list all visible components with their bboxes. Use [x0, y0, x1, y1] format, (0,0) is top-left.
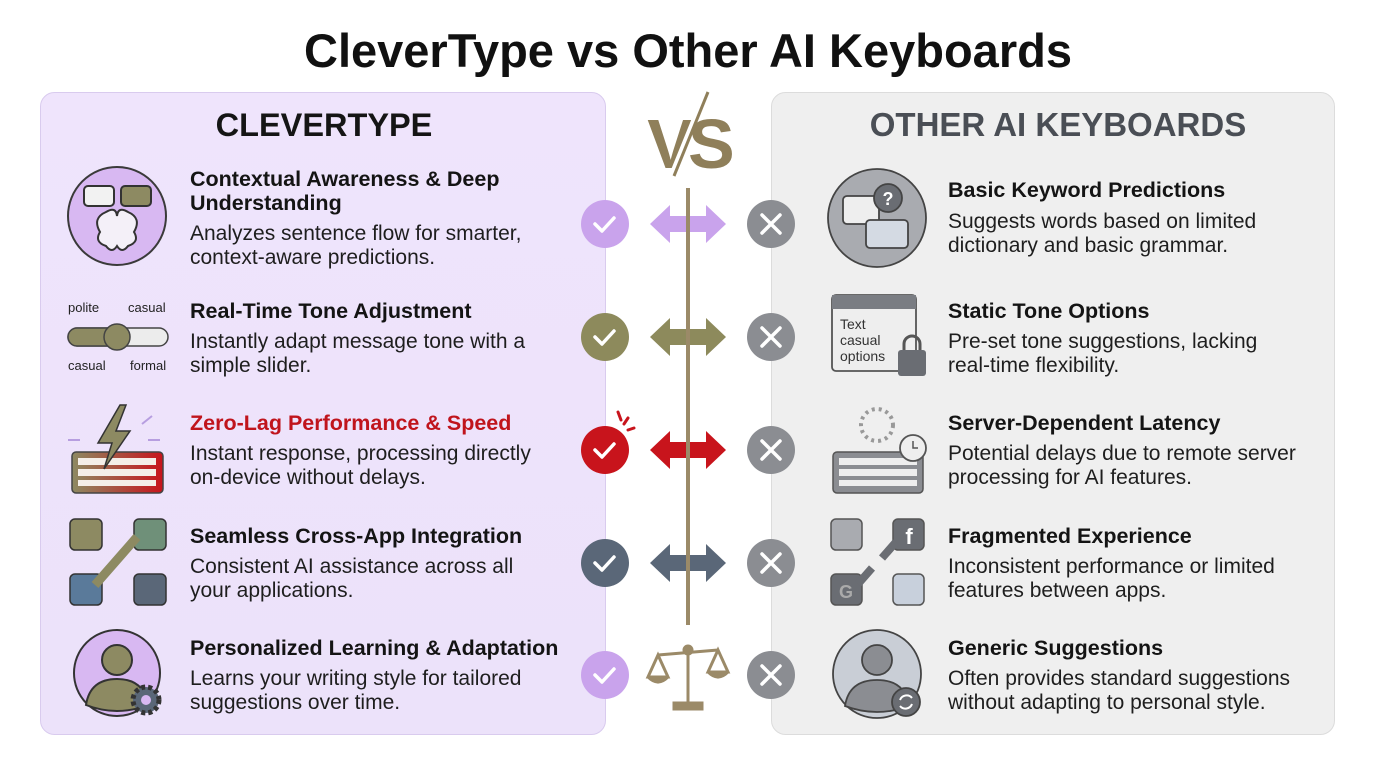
check marks — [581, 200, 634, 699]
arrows — [650, 200, 726, 585]
text: basic keyword: dictionary and basic grammar. — [948, 234, 1228, 257]
icon: vs: VS — [647, 105, 732, 183]
text: static tone: real-time flexibility. — [948, 354, 1119, 377]
text: fragmented: Inconsistent performance or limited — [948, 555, 1275, 578]
text: generic: Often provides standard suggestions — [948, 667, 1290, 690]
text: basic keyword — [948, 178, 1256, 257]
text: static tone — [948, 299, 1257, 377]
icon: tone slider: casual — [128, 300, 166, 315]
text: fragmented — [948, 524, 1275, 602]
title: CleverType vs Other AI Keyboards — [304, 24, 1072, 77]
text: fragmented: Fragmented Experience — [948, 524, 1192, 548]
row 2 left — [68, 299, 525, 377]
text: basic keyword: Suggests words based on limited — [948, 210, 1256, 233]
icon: static tone window: options — [840, 348, 885, 364]
row 3 left — [68, 405, 531, 493]
text: server latency: Server-Dependent Latency — [948, 411, 1220, 435]
icon: static tone window — [832, 295, 926, 376]
text: contextual awareness: Understanding — [190, 191, 342, 215]
icon: cross-app — [70, 519, 166, 605]
row 5 left — [74, 630, 558, 716]
text: tone — [190, 299, 525, 377]
icon: static tone window: Text — [840, 316, 866, 332]
row 2 right — [832, 295, 1257, 377]
row 4 left — [70, 519, 522, 605]
row 3 right — [833, 409, 1296, 493]
text: contextual awareness — [190, 167, 521, 269]
row 1 right — [828, 169, 1256, 267]
text: tone: Instantly adapt message tone with a — [190, 330, 525, 353]
text: zero-lag: on-device without delays. — [190, 466, 426, 489]
icon: keyboard lightning — [68, 405, 163, 493]
icon: fragmented apps — [831, 519, 924, 605]
icon: tone slider: polite — [68, 300, 99, 315]
text: cross-app: Consistent AI assistance across all — [190, 555, 513, 578]
text: zero-lag: Zero-Lag Performance & Speed — [190, 411, 511, 435]
text: cross-app: your applications. — [190, 579, 353, 602]
text: contextual awareness: Contextual Awareness & Deep — [190, 167, 499, 191]
text: static tone: Static Tone Options — [948, 299, 1150, 323]
text: personalized: Learns your writing style for tailored — [190, 667, 521, 690]
text: personalized — [190, 636, 558, 714]
text: cross-app: Seamless Cross-App Integration — [190, 524, 522, 548]
icon: keyboard clock — [833, 409, 926, 493]
icon: generic user — [833, 630, 921, 718]
x marks — [747, 200, 795, 699]
text: generic: Generic Suggestions — [948, 636, 1163, 660]
row 5 right — [833, 630, 1290, 718]
text: cross-app — [190, 524, 522, 602]
icon: question chat: ? — [882, 189, 894, 209]
text: generic — [947, 636, 1290, 714]
panel heading: other: OTHER AI KEYBOARDS — [870, 106, 1246, 143]
text: tone: Real-Time Tone Adjustment — [190, 299, 472, 323]
icon: fragmented apps: f — [905, 524, 913, 549]
text: zero-lag: Instant response, processing directly — [190, 442, 531, 465]
text: fragmented: features between apps. — [948, 579, 1166, 602]
center line — [686, 188, 690, 625]
icon: question chat — [828, 169, 926, 267]
text: server latency — [948, 411, 1296, 489]
text: static tone: Pre-set tone suggestions, lacking — [948, 330, 1257, 353]
text: personalized: suggestions over time. — [190, 691, 400, 714]
text: server latency: processing for AI features. — [948, 466, 1192, 489]
row 4 right — [831, 519, 1275, 605]
icon: brain — [68, 167, 166, 265]
text: generic: without adapting to personal style. — [947, 691, 1266, 714]
icon: tone slider: casual — [68, 358, 106, 373]
text: contextual awareness: Analyzes sentence flow for smarter, — [190, 222, 521, 245]
text: tone: simple slider. — [190, 354, 311, 377]
text: personalized: Personalized Learning & Adaptation — [190, 636, 558, 660]
icon: personalized user — [74, 630, 160, 716]
panel heading: clevertype: CLEVERTYPE — [216, 107, 432, 143]
text: contextual awareness: context-aware predictions. — [190, 246, 435, 269]
icon: fragmented apps: G — [839, 582, 853, 602]
row 1 left — [68, 167, 521, 269]
text: basic keyword: Basic Keyword Predictions — [948, 178, 1225, 202]
icon: tone slider — [68, 300, 168, 373]
icon: scales — [648, 645, 728, 709]
icon: static tone window: casual — [840, 332, 880, 348]
text: server latency: Potential delays due to remote server — [948, 442, 1296, 465]
icon: tone slider: formal — [130, 358, 166, 373]
text: zero-lag — [190, 411, 531, 489]
